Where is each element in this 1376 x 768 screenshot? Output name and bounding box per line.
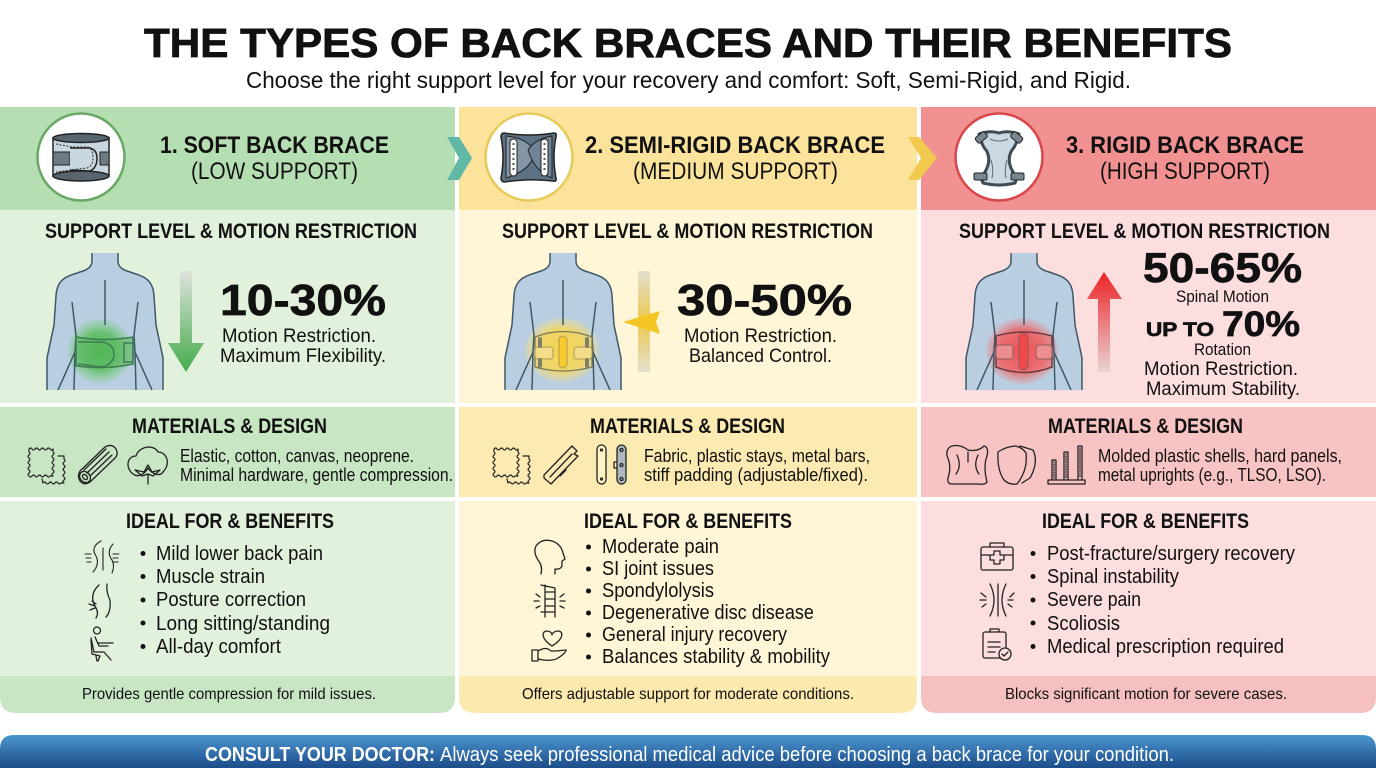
footer note: Provides gentle compression for mild issues. xyxy=(82,686,376,703)
icon: fabric swatches xyxy=(493,448,530,484)
list: ideal for: Posture correction xyxy=(156,589,306,611)
icon: spine stress xyxy=(980,584,1014,616)
illustration: torso with semi-rigid belt xyxy=(505,253,621,390)
list: ideal for: All-day comfort xyxy=(156,636,281,658)
heading: soft brace: (LOW SUPPORT) xyxy=(191,158,358,185)
text: materials: stiff padding (adjustable/fixed). xyxy=(644,465,868,485)
list: ideal for: Long sitting/standing xyxy=(156,613,330,635)
text: materials: Minimal hardware, gentle compression. xyxy=(180,465,453,485)
arrow: medium support xyxy=(623,271,660,372)
arrow: chevron soft to semi-rigid xyxy=(447,137,472,180)
heading: semi-rigid brace: (MEDIUM SUPPORT) xyxy=(633,158,838,185)
list: ideal for: Severe pain xyxy=(1047,589,1141,611)
text: materials xyxy=(1098,446,1342,485)
text: motion restriction: Maximum Stability. xyxy=(1146,378,1300,400)
stat: up to 70% rotation xyxy=(1146,305,1300,359)
icon: head xyxy=(535,540,565,574)
footer note: Blocks significant motion for severe cases. xyxy=(1005,686,1287,703)
icon: molded shell xyxy=(947,446,988,484)
footer note: Offers adjustable support for moderate conditions. xyxy=(522,686,854,703)
section heading: support level: SUPPORT LEVEL & MOTION RESTRICTION xyxy=(502,220,873,243)
icon: spine pain xyxy=(85,541,119,573)
section heading: support level: SUPPORT LEVEL & MOTION RESTRICTION xyxy=(45,220,417,243)
section heading: materials: MATERIALS & DESIGN xyxy=(1048,415,1243,438)
stat: 30-50%: 30-50% xyxy=(677,276,852,325)
heading: semi-rigid brace xyxy=(585,132,885,185)
icon: fabric swatches xyxy=(28,448,65,484)
list: ideal for: Scoliosis xyxy=(1047,613,1120,635)
icon: metal uprights xyxy=(1048,446,1085,484)
arrow: high support xyxy=(1087,272,1122,372)
icon: heart on hand xyxy=(532,631,566,661)
list: ideal for: Post-fracture/surgery recovery xyxy=(1047,543,1295,565)
icon: prescription clipboard xyxy=(983,629,1011,660)
text: materials: Molded plastic shells, hard panels, xyxy=(1098,446,1342,466)
text: materials: Elastic, cotton, canvas, neoprene. xyxy=(180,446,414,466)
panel: soft back brace xyxy=(0,107,455,713)
icon: plastic stays xyxy=(544,446,578,484)
section heading: materials: MATERIALS & DESIGN xyxy=(590,415,785,438)
title: THE TYPES OF BACK BRACES AND THEIR BENEFITS xyxy=(144,20,1232,66)
heading: semi-rigid brace: 2. SEMI-RIGID BACK BRACE xyxy=(585,132,885,159)
stat: 10-30%: Motion Restriction. xyxy=(222,325,376,347)
icon: elastic roll xyxy=(77,445,117,485)
text: motion restriction: Motion Restriction. xyxy=(1144,358,1298,380)
list: ideal for xyxy=(140,543,330,658)
illustration: torso with soft belt xyxy=(47,253,163,390)
text: materials: metal uprights (e.g., TLSO, LSO). xyxy=(1098,465,1326,485)
heading: soft brace: 1. SOFT BACK BRACE xyxy=(160,132,389,159)
list: ideal for: Balances stability & mobility xyxy=(602,646,830,668)
stat: 50-65% spinal motion: Spinal Motion xyxy=(1176,288,1269,306)
text: materials xyxy=(180,446,453,485)
text: materials: Fabric, plastic stays, metal bars, xyxy=(644,446,870,466)
list: ideal for: Moderate pain xyxy=(602,536,719,558)
banner: consult your doctor xyxy=(0,735,1376,768)
list: ideal for: Spondylolysis xyxy=(602,580,714,602)
section heading: materials: MATERIALS & DESIGN xyxy=(132,415,327,438)
stat: 10-30%: 10-30% xyxy=(220,276,386,325)
stat: 10-30% xyxy=(220,276,386,367)
stat: up to 70% rotation: Rotation xyxy=(1194,341,1251,359)
list: ideal for: Muscle strain xyxy=(156,566,265,588)
banner: consult your doctor: CONSULT YOUR DOCTOR: xyxy=(205,744,435,766)
list: ideal for: Medical prescription required xyxy=(1047,636,1284,658)
list: ideal for: SI joint issues xyxy=(602,558,714,580)
subtitle: Choose the right support level for your recovery and comfort: Soft, Semi-Rigid, and Rigid. xyxy=(246,67,1131,93)
panel: semi-rigid back brace xyxy=(459,107,917,713)
icon: rigid brace xyxy=(956,114,1042,200)
list: ideal for xyxy=(1030,543,1295,658)
icon: medical kit xyxy=(981,543,1013,570)
text: motion restriction xyxy=(1144,358,1300,400)
section heading: ideal for: IDEAL FOR & BENEFITS xyxy=(584,510,792,533)
heading: soft brace xyxy=(160,132,389,185)
icon: spine xyxy=(534,585,565,617)
heading: rigid brace xyxy=(1066,132,1304,185)
list: ideal for: Spinal instability xyxy=(1047,566,1179,588)
arrow: chevron semi-rigid to rigid xyxy=(908,137,937,180)
section heading: ideal for: IDEAL FOR & BENEFITS xyxy=(1042,510,1249,533)
text: materials xyxy=(644,446,870,485)
list: ideal for: General injury recovery xyxy=(602,624,787,646)
stat: 30-50%: Balanced Control. xyxy=(689,345,832,367)
stat: 30-50% xyxy=(677,276,852,367)
banner: consult your doctor: Always seek professional medical advice before choosing a back brace for your condition. xyxy=(440,744,1174,766)
section heading: ideal for: IDEAL FOR & BENEFITS xyxy=(126,510,334,533)
icon: soft brace xyxy=(38,114,124,200)
icon: cotton xyxy=(128,447,167,484)
heading: rigid brace: 3. RIGID BACK BRACE xyxy=(1066,132,1304,159)
icon: semi-rigid brace xyxy=(486,114,572,200)
stat: 10-30%: Maximum Flexibility. xyxy=(220,345,386,367)
icon: metal bars xyxy=(597,445,626,484)
list: ideal for xyxy=(586,536,830,668)
stat: up to 70% rotation: 70% xyxy=(1222,305,1300,344)
list: ideal for: Mild lower back pain xyxy=(156,543,323,565)
stat: 50-65% spinal motion: 50-65% xyxy=(1143,244,1302,291)
icon: seated person xyxy=(91,627,113,661)
arrow: low support xyxy=(168,271,204,372)
illustration: torso with rigid belt xyxy=(966,253,1082,390)
stat: up to 70% rotation: UP TO xyxy=(1146,320,1214,341)
panel: rigid back brace xyxy=(921,107,1376,713)
icon: lower back xyxy=(89,584,110,618)
stat: 50-65% spinal motion xyxy=(1143,244,1302,306)
stat: 30-50%: Motion Restriction. xyxy=(684,325,837,347)
list: ideal for: Degenerative disc disease xyxy=(602,602,814,624)
heading: rigid brace: (HIGH SUPPORT) xyxy=(1100,158,1270,185)
icon: hard panels xyxy=(998,446,1035,484)
